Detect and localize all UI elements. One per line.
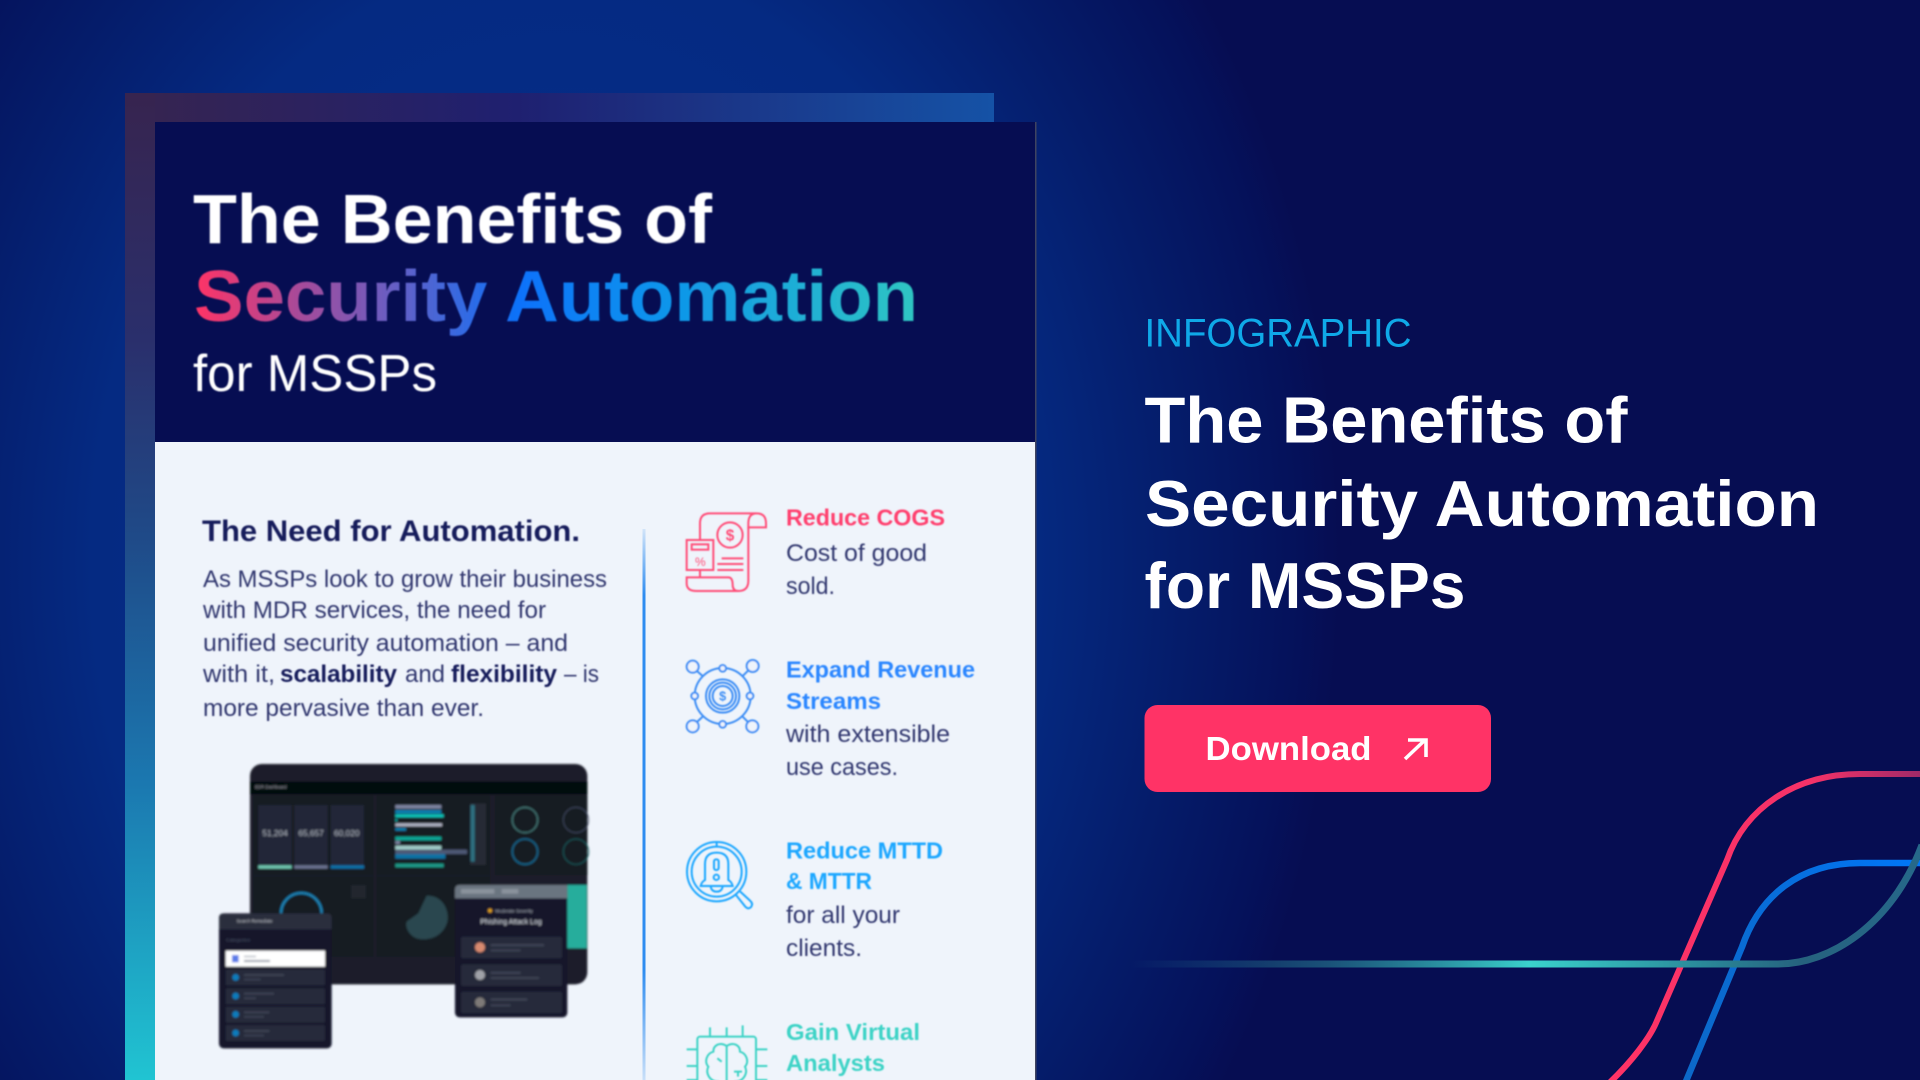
card body: [155, 442, 1035, 1080]
dashboard screenshots: [219, 764, 589, 1048]
benefit: expand revenue streams: [687, 656, 975, 781]
icon: AI brain chip: [687, 1025, 767, 1080]
card title: [193, 180, 918, 403]
intro text block: unified security automation – and: [203, 630, 568, 657]
main dashboard: 60,020: [334, 828, 360, 838]
benefit: reduce MTTD and MTTR: clients.: [786, 935, 862, 962]
main heading: Security Automation: [1145, 467, 1819, 540]
icon: arrow: [1405, 740, 1426, 759]
benefit: expand revenue streams: Expand Revenue: [786, 656, 975, 682]
intro text block: [202, 515, 607, 722]
benefit: reduce COGS: Cost of good: [786, 540, 927, 567]
benefit: reduce MTTD and MTTR: [687, 838, 943, 962]
intro text block: The Need for Automation.: [202, 515, 580, 548]
card title: for MSSPs: [193, 345, 437, 403]
download button: Download: [1206, 730, 1372, 767]
icon: revenue network: [687, 660, 759, 732]
download button: [1144, 705, 1491, 792]
intro text block: – is: [564, 661, 599, 688]
panel: phishing attack log: Phishing Attack Log: [480, 919, 542, 926]
main dashboard: [250, 764, 589, 984]
main heading: for MSSPs: [1144, 549, 1466, 622]
main heading: [1144, 384, 1819, 622]
icon: receipt: [687, 513, 766, 591]
panel: phishing attack log: [455, 885, 587, 1017]
infographic preview card: [155, 122, 1036, 1080]
main dashboard: 65,657: [298, 828, 324, 838]
benefit: gain virtual analysts: [687, 1019, 920, 1080]
panel: search categories: Search Remediate: [237, 919, 273, 924]
intro text block: with it,: [202, 661, 275, 688]
benefit: expand revenue streams: with extensible: [785, 721, 950, 748]
intro text block: with MDR services, the need for: [202, 597, 546, 624]
intro text block: flexibility: [451, 661, 558, 688]
benefit: reduce MTTD and MTTR: & MTTR: [786, 868, 872, 894]
main dashboard: EDR Dashboard: [255, 785, 287, 790]
panel: search categories: [219, 913, 332, 1048]
card title: The Benefits of: [193, 180, 713, 258]
benefit: reduce COGS: [687, 504, 945, 600]
intro text block: scalability: [280, 661, 398, 688]
category label: INFOGRAPHIC: [1144, 312, 1412, 356]
benefit: gain virtual analysts: Gain Virtual: [786, 1019, 920, 1045]
card title: Security Automation: [194, 257, 918, 337]
benefit: reduce MTTD and MTTR: for all your: [786, 902, 900, 929]
panel: phishing attack log: Moderate Severity: [495, 909, 533, 914]
main heading: The Benefits of: [1144, 384, 1628, 456]
gradient frame behind card: [125, 93, 994, 1080]
benefit: reduce MTTD and MTTR: Reduce MTTD: [786, 838, 943, 864]
icon: receipt: $: [726, 528, 735, 545]
panel: search categories: Categories: [226, 937, 251, 943]
card header: [155, 122, 1036, 1080]
column divider: [642, 529, 646, 1080]
benefit: expand revenue streams: use cases.: [786, 754, 898, 781]
benefit: reduce COGS: sold.: [786, 573, 835, 600]
benefit: expand revenue streams: Streams: [786, 688, 881, 714]
intro text block: more pervasive than ever.: [203, 695, 484, 722]
icon: alert magnifier: [687, 841, 752, 908]
benefit: reduce COGS: Reduce COGS: [786, 504, 945, 530]
icon: receipt: %: [695, 555, 706, 569]
intro text block: and: [405, 661, 445, 688]
main dashboard: 51,204: [262, 828, 288, 838]
intro text block: As MSSPs look to grow their business: [203, 566, 607, 593]
icon: revenue network: $: [719, 690, 726, 704]
benefit: gain virtual analysts: Analysts: [786, 1050, 885, 1076]
decorative circuit lines: [1130, 774, 1920, 1080]
